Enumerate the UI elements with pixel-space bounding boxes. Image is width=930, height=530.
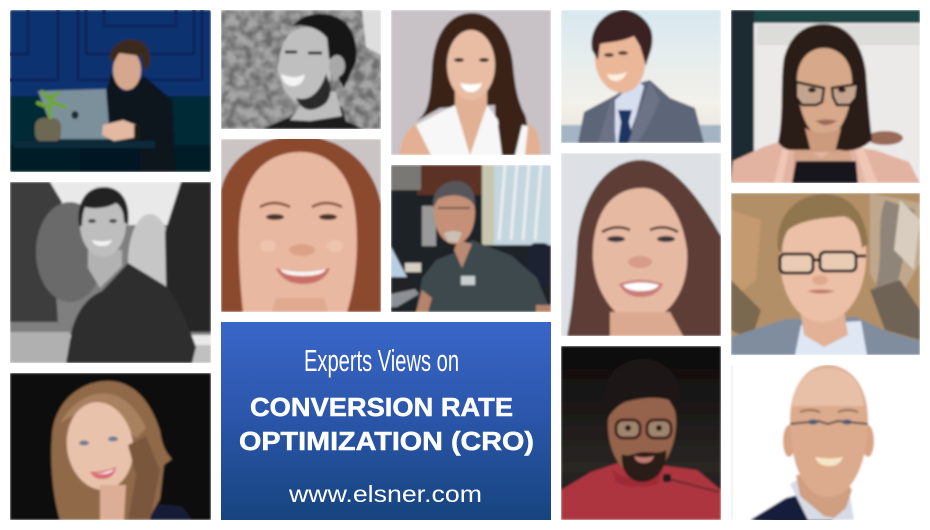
- photo: smiling man in black shirt, monochrome: [10, 182, 211, 363]
- photo: smiling woman with long dark hair: [561, 153, 721, 336]
- photo: woman with dark bob and glasses: [731, 10, 920, 183]
- photo: bald man with glasses on white: [731, 365, 876, 520]
- website url: www.elsner.com: [288, 481, 482, 507]
- photo: man in grey polo in office: [391, 165, 551, 312]
- photo: smiling woman in white top: [391, 10, 551, 155]
- photo: smiling woman with auburn hair: [221, 136, 381, 312]
- photo: man with laptop on navy wall: [10, 10, 211, 172]
- photo: man with black glasses on rock: [731, 193, 920, 355]
- photo: laughing bearded man, monochrome leaves: [221, 10, 381, 129]
- photo: woman with long brown hair on black: [10, 373, 211, 520]
- heading: conversion rate: CONVERSION RATE: [250, 392, 513, 422]
- photo: young man in grey suit: [561, 10, 721, 143]
- banner: title panel: [221, 322, 551, 520]
- heading: optimization cro: OPTIMIZATION (CRO): [239, 426, 534, 456]
- heading: experts views: Experts Views on: [304, 343, 459, 378]
- photo: bearded man in red sweater: [561, 346, 721, 520]
